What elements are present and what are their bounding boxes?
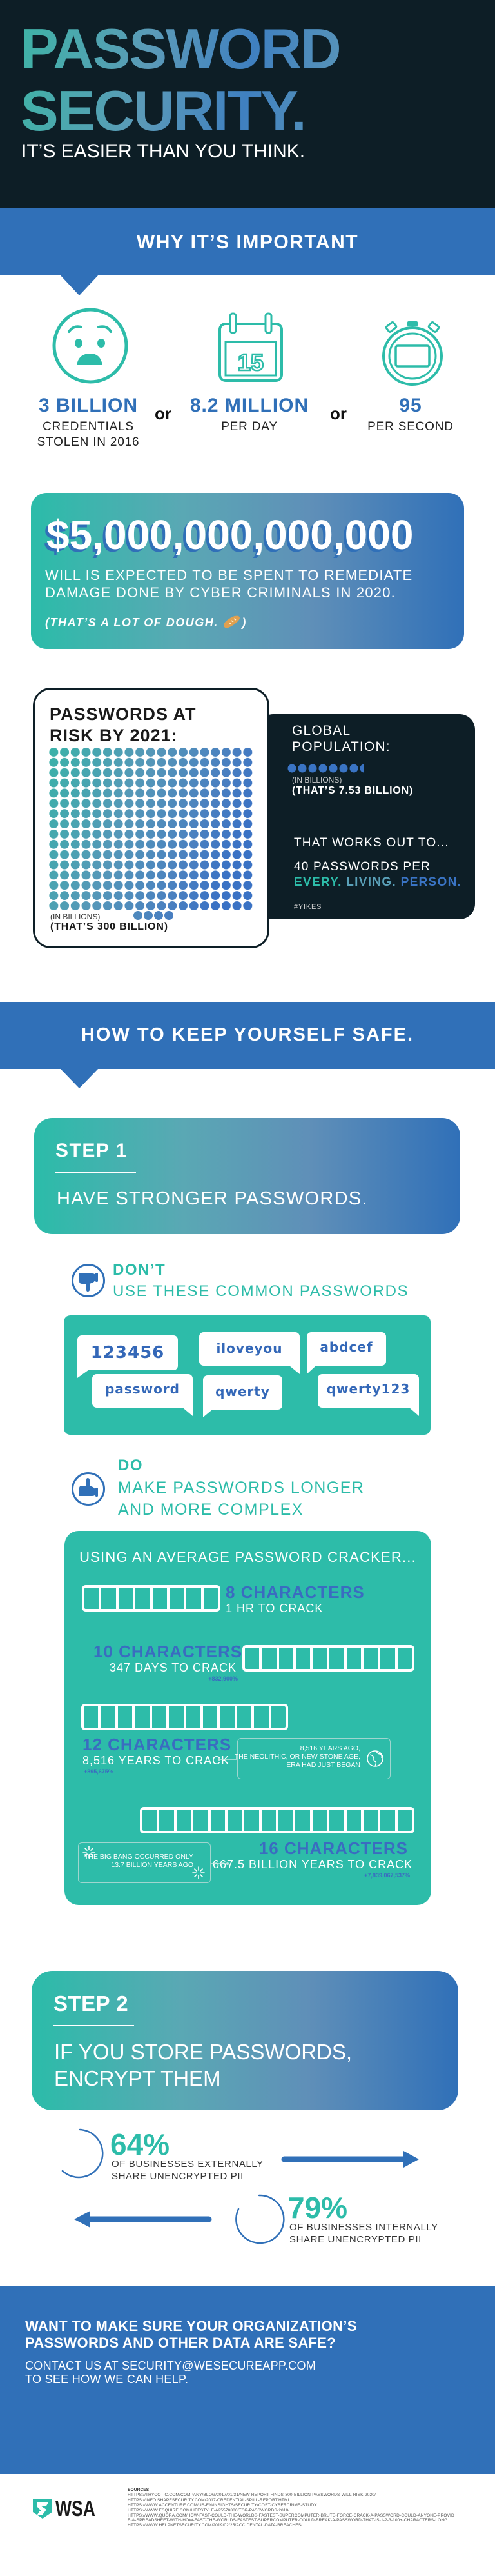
panel: call to action: TO SEE HOW WE CAN HELP. — [25, 2373, 188, 2386]
bar: 10 characters — [242, 1645, 414, 1672]
dot grid chart — [49, 748, 253, 920]
bar: 8 characters — [82, 1585, 220, 1612]
label: 16 characters: 667.5 BILLION YEARS TO CRACK — [213, 1858, 412, 1871]
stat: 3 billion — [37, 395, 139, 449]
do heading — [118, 1457, 365, 1519]
bubble: abdcef — [307, 1332, 386, 1366]
label: 10 characters — [93, 1642, 242, 1682]
works out text: THAT WORKS OUT TO... — [294, 836, 449, 850]
sources: SOURCES — [128, 2488, 149, 2492]
panel: step 1: HAVE STRONGER PASSWORDS. — [57, 1188, 368, 1209]
panel: step 2: IF YOU STORE PASSWORDS, — [54, 2040, 352, 2064]
panel: step 1 — [34, 1118, 460, 1234]
bubble: iloveyou — [199, 1332, 300, 1366]
sources: HTTPS://WWW.QUORA.COM/HOW-FAST-COULD-THE-WORLDS-FASTEST-SUPERCOMPUTER-BRUTE-FORCE-CRACK-A-PASSWORD-COULD-ANYONE-PROVID — [128, 2513, 454, 2518]
icon: arc — [62, 2129, 103, 2178]
icon: stopwatch — [382, 321, 443, 386]
heading: PASSWORDS AT — [50, 704, 196, 724]
label: 12 characters — [82, 1735, 231, 1775]
label: 12 characters: +895,675% — [84, 1768, 113, 1775]
callout: neolithic — [237, 1738, 391, 1779]
big number: $5,000,000,000,000 — [46, 512, 413, 558]
stat: 95: PER SECOND — [367, 420, 454, 434]
section band: how to keep safe: HOW TO KEEP YOURSELF SAFE. — [81, 1024, 414, 1045]
label: 16 characters: 16 CHARACTERS — [259, 1839, 408, 1858]
label: 12 characters: 12 CHARACTERS — [82, 1735, 231, 1754]
stat: 8.2 million: PER DAY — [221, 420, 278, 434]
stat: 64% external — [62, 2128, 264, 2182]
bar: 12 characters — [81, 1704, 288, 1730]
callout: big bang — [78, 1842, 211, 1883]
label: 16 characters: +7,839,067,537% — [364, 1872, 410, 1879]
description — [45, 567, 412, 601]
label: 8 characters: 1 HR TO CRACK — [226, 1602, 323, 1615]
icon: calendar: 15 — [238, 349, 264, 375]
icon: arc — [235, 2195, 285, 2244]
label: 16 characters — [213, 1839, 412, 1879]
stat: 64% external: SHARE UNENCRYPTED PII — [112, 2171, 244, 2182]
panel: step 2 — [32, 1971, 458, 2110]
callout: neolithic: THE NEOLITHIC, OR NEW STONE AGE, — [235, 1753, 360, 1761]
stat: 79% internal — [235, 2191, 438, 2245]
bar: 16 characters — [140, 1807, 414, 1833]
panel: passwords at risk: (IN BILLIONS) — [50, 912, 100, 921]
panel: population dark: (IN BILLIONS) — [292, 775, 342, 784]
header — [0, 0, 495, 208]
global population label: POPULATION: — [292, 739, 391, 754]
bubble: qwerty: qwerty — [215, 1384, 270, 1399]
panel: population dark: 40 PASSWORDS PER — [294, 860, 431, 874]
don't heading: DON’T — [113, 1261, 166, 1279]
label: 8 characters — [226, 1583, 365, 1615]
title: PASSWORD — [21, 17, 340, 81]
section band: why it's important: WHY IT’S IMPORTANT — [137, 232, 358, 253]
stat: 3 billion: CREDENTIALS — [43, 420, 134, 434]
stat: 95: 95 — [399, 395, 422, 416]
sources: HTTPS://INFO.SHAPESECURITY.COM/2017-CREDENTIAL-SPILL-REPORT.HTML — [128, 2498, 290, 2502]
icon: burst — [82, 1846, 95, 1859]
aside with bread: (THAT’S A LOT OF DOUGH. ) — [45, 616, 247, 629]
panel: step 2: ENCRYPT THEM — [54, 2066, 221, 2090]
bubble: iloveyou: iloveyou — [216, 1341, 283, 1356]
panel: step 2: STEP 2 — [53, 1992, 128, 2015]
arrow: left — [74, 2211, 211, 2228]
label: 12 characters: 8,516 YEARS TO CRACK — [82, 1754, 229, 1767]
sources: HTTPS://THYCOTIC.COM/COMPANY/BLOG/2017/01/31/NEW-REPORT-FINDS-300-BILLION-PASSWORDS-WILL-RISK-2020/ — [128, 2493, 376, 2497]
description: DAMAGE DONE BY CYBER CRIMINALS IN 2020. — [45, 584, 396, 601]
bubble: qwerty — [203, 1375, 282, 1410]
panel: call to action: CONTACT US AT SECURITY@WESECUREAPP.COM — [25, 2359, 316, 2372]
icon: thumbs up — [72, 1472, 105, 1506]
logo: WSA: WSA — [55, 2497, 95, 2521]
do heading: DO — [118, 1457, 143, 1474]
stat: 8.2 million — [190, 395, 309, 434]
population dots — [287, 764, 364, 773]
heading: RISK BY 2021: — [50, 726, 178, 745]
do heading: AND MORE COMPLEX — [118, 1501, 304, 1519]
stat: 64% external: OF BUSINESSES EXTERNALLY — [112, 2159, 264, 2170]
subtitle: IT’S EASIER THAN YOU THINK. — [21, 141, 305, 162]
panel: step 1: STEP 1 — [55, 1140, 128, 1161]
stat: 64% external: 64% — [110, 2128, 170, 2161]
panel: common passwords — [64, 1315, 431, 1435]
label: 10 characters: 347 DAYS TO CRACK — [110, 1661, 237, 1674]
icon: calendar — [218, 312, 283, 382]
bubble: 123456: 123456 — [91, 1343, 164, 1363]
bubble: password — [92, 1374, 193, 1408]
don't heading — [113, 1261, 409, 1300]
panel: population dark: EVERY. LIVING. PERSON. — [294, 875, 461, 889]
bubble: qwerty123 — [318, 1374, 419, 1408]
bubble: abdcef: abdcef — [320, 1339, 373, 1355]
or: or — [155, 404, 171, 423]
bubble tails — [77, 1361, 419, 1417]
section band: why it's important — [0, 208, 495, 275]
bubble: qwerty123: qwerty123 — [327, 1381, 410, 1397]
panel: population dark — [258, 714, 475, 919]
panel: cost callout — [31, 493, 464, 649]
stat: 3 billion: STOLEN IN 2016 — [37, 435, 139, 449]
connector — [211, 1862, 229, 1865]
callout: big bang: 13.7 BILLION YEARS AGO — [111, 1861, 193, 1869]
stat: 79% internal: OF BUSINESSES INTERNALLY — [289, 2222, 438, 2233]
arrow: right — [281, 2151, 419, 2168]
bubble: password: password — [105, 1381, 180, 1397]
don't heading: USE THESE COMMON PASSWORDS — [113, 1283, 409, 1300]
sources: HTTPS://WWW.ESQUIRE.COM/LIFESTYLE/A25570880/TOP-PASSWORDS-2018/ — [128, 2508, 289, 2513]
stat: 95 — [367, 395, 454, 434]
sources: HTTPS://WWW.ACCENTURE.COM/US-EN/INSIGHTS/SECURITY/COST-CYBERCRIME-STUDY — [128, 2503, 317, 2508]
stat: 8.2 million: 8.2 MILLION — [190, 395, 309, 416]
global population label: GLOBAL — [292, 723, 351, 738]
do heading: MAKE PASSWORDS LONGER — [118, 1479, 365, 1497]
panel: call to action — [0, 2286, 495, 2474]
icon: worried face — [53, 308, 128, 383]
icon: globe — [367, 1750, 383, 1767]
panel: population dark: (THAT’S 7.53 BILLION) — [292, 785, 413, 796]
icon: burst — [192, 1866, 205, 1879]
callout: neolithic: 8,516 YEARS AGO, — [300, 1744, 360, 1752]
stat: 3 billion: 3 BILLION — [39, 395, 138, 416]
icon: thumbs down — [72, 1264, 105, 1297]
band pointer — [61, 275, 98, 295]
description: WILL IS EXPECTED TO BE SPENT TO REMEDIATE — [45, 567, 412, 583]
panel: passwords at risk — [33, 688, 269, 948]
title — [21, 21, 340, 139]
logo: WSA — [33, 2497, 95, 2521]
sources: E-A-SPREADSHEET-WITH-HOW-FAST-THE-WORLDS-FASTEST-SUPERCOMPUTER-COULD-BREAK-A-PASSWORD-THAT-IS-1-2-3-100+-CHARACTERS-LONG — [128, 2518, 447, 2522]
panel: cracking times — [64, 1531, 431, 1905]
panel: call to action: WANT TO MAKE SURE YOUR ORGANIZATION’S — [25, 2318, 357, 2334]
or: or — [330, 404, 347, 423]
band pointer — [61, 1069, 98, 1088]
label: 10 characters: +832,900% — [208, 1675, 238, 1682]
panel: population dark: #YIKES — [294, 903, 322, 911]
stat: 79% internal: SHARE UNENCRYPTED PII — [289, 2234, 422, 2245]
panel heading: USING AN AVERAGE PASSWORD CRACKER... — [79, 1549, 416, 1565]
connector — [218, 1758, 238, 1761]
bubble: 123456 — [77, 1335, 178, 1370]
sources: HTTPS://WWW.HELPNETSECURITY.COM/2019/02/25/ACCIDENTAL-DATA-BREACHES/ — [128, 2523, 302, 2528]
callout: neolithic: ERA HAD JUST BEGAN — [286, 1761, 360, 1769]
global population label — [292, 723, 391, 754]
panel: call to action: PASSWORDS AND OTHER DATA ARE SAFE? — [25, 2335, 336, 2351]
heading — [50, 704, 196, 745]
label: 10 characters: 10 CHARACTERS — [93, 1642, 242, 1661]
callout: big bang: THE BIG BANG OCCURRED ONLY — [84, 1853, 193, 1861]
sources — [128, 2488, 454, 2528]
stat: 79% internal: 79% — [288, 2191, 347, 2224]
panel: passwords at risk: (THAT’S 300 BILLION) — [50, 921, 168, 932]
label: 8 characters: 8 CHARACTERS — [226, 1583, 365, 1602]
section band: how to keep safe — [0, 1002, 495, 1069]
